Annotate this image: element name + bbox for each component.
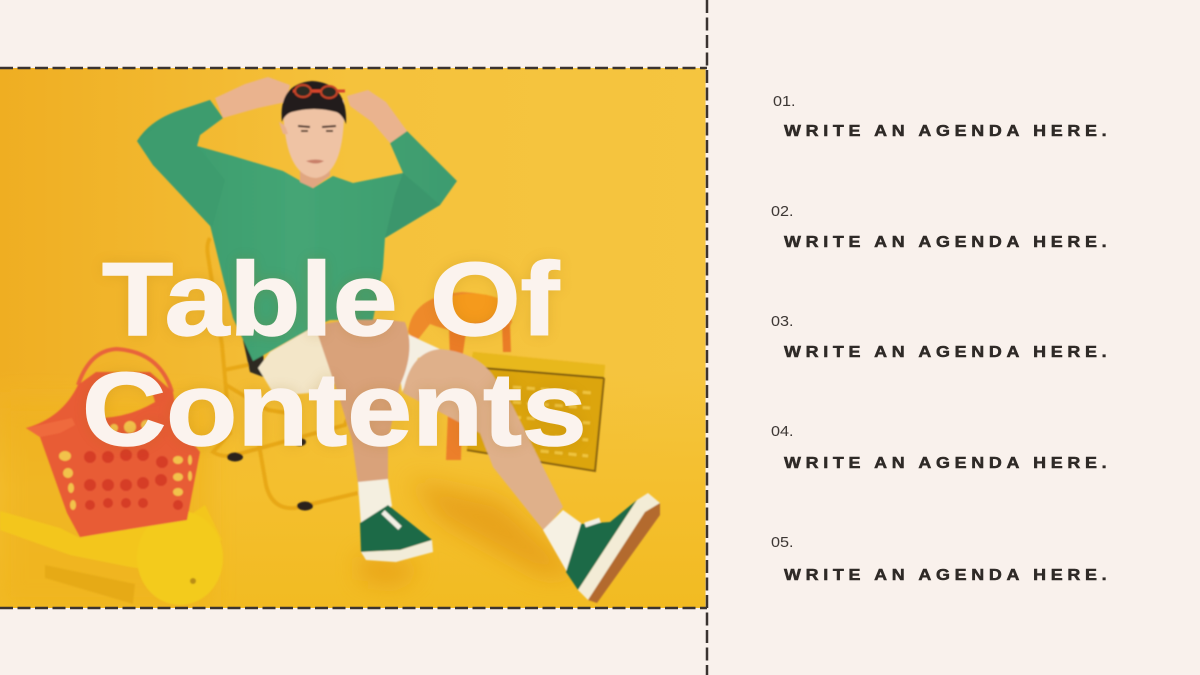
agenda item 3: 03. (771, 313, 794, 330)
title: Contents (82, 352, 587, 468)
agenda item 5: 05. (771, 534, 794, 551)
agenda item 2: WRITE AN AGENDA HERE. (784, 234, 1111, 251)
agenda item 5: WRITE AN AGENDA HERE. (784, 567, 1111, 584)
agenda item 1: WRITE AN AGENDA HERE. (784, 123, 1111, 140)
chair seat strap (243, 340, 266, 378)
shoes (360, 493, 660, 603)
title (82, 242, 587, 468)
dashed frame (0, 0, 707, 675)
head and arms (215, 77, 407, 188)
agenda item 3 (771, 313, 1111, 361)
yellow stool in the foreground (0, 505, 223, 605)
agenda item 2 (771, 203, 1111, 251)
agenda item 2: 02. (771, 203, 794, 220)
agenda item 1: 01. (773, 93, 796, 110)
title: Table Of (102, 242, 559, 358)
agenda item 4 (771, 423, 1111, 472)
photo: man in green sweatshirt on yellow set (0, 0, 708, 675)
chair (207, 238, 358, 508)
stool (408, 292, 512, 460)
agenda item 3: WRITE AN AGENDA HERE. (784, 344, 1111, 361)
legs (315, 319, 581, 572)
orange basket (26, 349, 200, 537)
agenda item 1 (773, 93, 1111, 140)
agenda item 4: 04. (771, 423, 794, 440)
agenda item 5 (771, 534, 1111, 584)
crate (467, 352, 605, 471)
shorts (258, 326, 442, 396)
floor shadows (360, 480, 580, 585)
sweatshirt (137, 100, 457, 361)
agenda item 4: WRITE AN AGENDA HERE. (784, 455, 1111, 472)
